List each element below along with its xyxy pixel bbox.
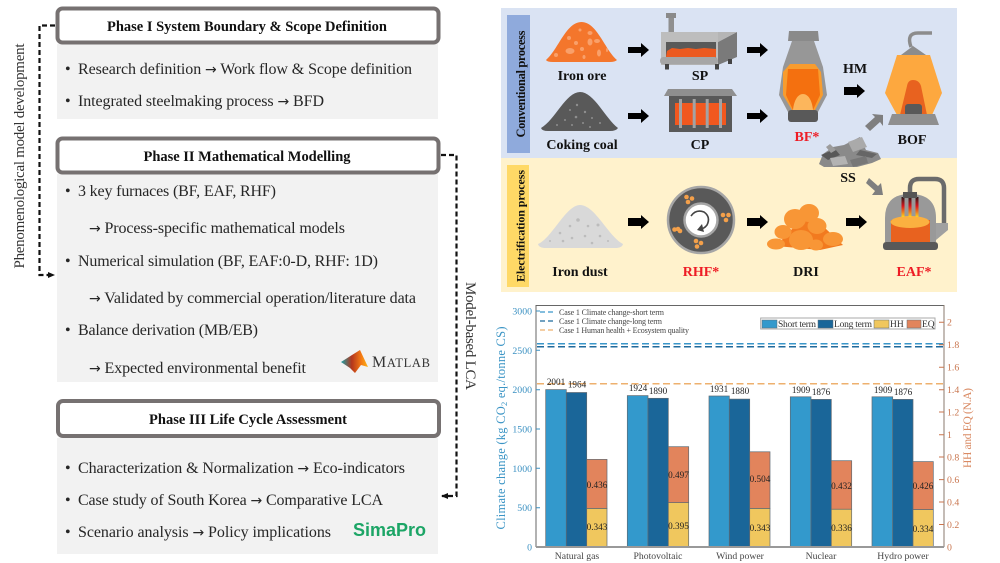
icon: MATLAB logo: MATLAB	[372, 354, 430, 371]
category labels: Natural gas	[555, 551, 599, 562]
chart axes and frame	[536, 305, 944, 547]
panel: phase III: Case study of South Korea → Comparative LCA	[78, 492, 383, 509]
panel: phase II: Balance derivation (MB/EB)	[78, 322, 258, 339]
bar value labels: 1924	[629, 383, 648, 393]
case reference lines	[537, 344, 944, 384]
bars: wind power	[709, 396, 770, 547]
bars: nuclear	[790, 397, 852, 547]
bar value labels: 1876	[812, 387, 831, 397]
legend: bar series: HH	[890, 320, 904, 330]
label: conventional process: Conventional process	[514, 30, 528, 138]
panel: phase I	[57, 8, 438, 119]
bar value labels: 0.504	[750, 474, 771, 484]
panel: phase II	[57, 138, 438, 382]
left axis tick labels: 0	[527, 542, 532, 554]
label: SP: SP	[692, 69, 709, 84]
icon: iron ore pile	[546, 22, 617, 62]
bar value labels: 1964	[568, 380, 587, 390]
bar value labels: 0.343	[587, 522, 608, 532]
bar value labels: 0.343	[750, 523, 771, 533]
category labels: Wind power	[716, 551, 765, 562]
panel: phase I: Integrated steelmaking process → BFD	[78, 93, 324, 110]
bar value labels: 0.432	[831, 481, 852, 491]
category labels: Nuclear	[806, 551, 837, 562]
label: HM: HM	[843, 62, 867, 77]
bar value labels: 1880	[731, 386, 750, 396]
right axis tick labels: 0.6	[947, 475, 959, 486]
legend: case reference lines: Case 1 Climate change-long term	[559, 317, 663, 326]
category labels: Hydro power	[877, 551, 929, 562]
right axis tick labels	[947, 318, 959, 554]
right axis tick labels: 1.4	[947, 385, 959, 396]
bars: photovoltaic	[627, 396, 689, 547]
bar value labels: 1931	[710, 384, 729, 394]
right axis tick labels: 0.8	[947, 452, 959, 464]
legend: case reference lines: Case 1 Human health + Ecosystem quality	[559, 326, 689, 335]
bar chart: climate change and HH/EQ by power source	[494, 305, 974, 562]
icon: DRI pellets	[767, 204, 843, 250]
bar value labels: 0.497	[668, 470, 689, 480]
arrow: scrap to BOF	[865, 114, 883, 131]
arrow: coal to CP	[628, 109, 649, 123]
label: EAF: EAF*	[896, 265, 932, 280]
arrow: phenomenological feedback	[40, 26, 55, 275]
legend: bar series: EQ	[922, 320, 935, 330]
icon: rotary hearth furnace	[668, 187, 734, 253]
label: electrification process	[507, 165, 529, 287]
panel: phase II: → Expected environmental benefit	[89, 360, 307, 377]
label: model-based LCA: Model-based LCA	[462, 282, 478, 390]
panel: phase III	[57, 401, 439, 554]
panel: phase III: •	[65, 460, 71, 477]
left column: methodology phases	[12, 8, 478, 554]
panel: phase II: 3 key furnaces (BF, EAF, RHF)	[78, 183, 276, 200]
icon: sinter plant	[660, 13, 737, 70]
label: BF: BF*	[795, 130, 819, 145]
right axis tick labels: 0.4	[947, 498, 959, 508]
left axis tick labels: 500	[517, 503, 532, 514]
label: SS: SS	[840, 171, 856, 186]
label: BOF: BOF	[898, 133, 926, 148]
left axis tick labels: 1000	[512, 464, 532, 475]
panel: phase I: •	[65, 61, 71, 78]
icon: electric arc furnace	[883, 179, 948, 250]
bar value labels: 0.334	[913, 524, 934, 534]
left axis tick labels: 2500	[512, 346, 532, 357]
bar value labels: 1876	[894, 387, 913, 397]
arrow: BF to BOF	[844, 84, 865, 98]
panel: phase III: •	[65, 524, 71, 541]
legend: case reference lines	[540, 308, 689, 335]
right axis tick labels: 0	[947, 542, 952, 554]
right axis tick labels: 0.2	[947, 520, 959, 531]
icon: coke plant	[664, 89, 737, 132]
category labels: Photovoltaic	[634, 551, 682, 562]
arrow: CP to BF	[747, 109, 768, 123]
right axis tick labels: 1	[947, 430, 952, 441]
panel: phase III: Phase III Life Cycle Assessment	[149, 412, 347, 428]
right axis tick labels: 2	[947, 318, 952, 328]
arrow: iron ore to SP	[628, 43, 649, 57]
icon: coking coal pile	[541, 92, 618, 131]
bar value labels: 0.436	[587, 480, 608, 490]
bar value labels: 1909	[792, 385, 811, 395]
label: DRI: DRI	[793, 265, 819, 280]
label: coking coal: Coking coal	[546, 138, 618, 153]
panel: phase III: Characterization & Normalization → Eco-indicators	[78, 460, 405, 477]
right axis tick labels: 1.2	[947, 408, 959, 418]
arrow: model-based LCA link	[441, 155, 456, 496]
legend: case reference lines: Case 1 Climate change-short term	[559, 308, 665, 317]
icon: MATLAB logo	[341, 350, 430, 373]
bars: hydro power	[872, 397, 933, 547]
bar value labels: 0.395	[668, 521, 689, 531]
panel: phase II: → Process-specific mathematical models	[89, 220, 345, 237]
bar value labels: 0.336	[831, 523, 852, 533]
label: iron dust: Iron dust	[552, 265, 608, 280]
label: conventional process	[507, 15, 530, 153]
bar value labels: 1890	[649, 386, 668, 396]
label: electrification process: Electrification process	[514, 170, 528, 282]
bars: natural gas	[546, 390, 607, 547]
icon: steel scrap pile	[819, 137, 881, 167]
process diagram	[501, 8, 957, 292]
panel: phase II: Phase II Mathematical Modelling	[144, 149, 351, 165]
legend: bar series: Short term	[778, 320, 817, 330]
panel: conventional process background	[501, 8, 957, 158]
legend: bar series: Long term	[834, 320, 873, 330]
panel: phase II: → Validated by commercial operation/literature data	[89, 290, 416, 307]
icon: basic oxygen furnace	[885, 33, 942, 125]
right axis title: HH and EQ (N.A)	[962, 388, 974, 468]
icon: SimaPro logo: SimaPro	[353, 520, 426, 540]
right axis tick labels: 1.6	[947, 362, 959, 374]
icon: blast furnace	[779, 31, 827, 122]
panel: phase II: •	[65, 253, 71, 270]
left axis title: eq./tonne CS)	[494, 326, 508, 402]
panel: phase I: Phase I System Boundary & Scope Definition	[107, 19, 387, 35]
left axis title: 2	[499, 402, 509, 406]
category labels	[555, 551, 929, 562]
left axis tick labels: 3000	[512, 306, 532, 318]
arrow: SP to BF	[747, 43, 768, 57]
left axis title: Climate change (kg CO	[494, 406, 508, 530]
panel: electrification process background	[501, 158, 957, 292]
panel: phase II: •	[65, 322, 71, 339]
panel: phase II: •	[65, 183, 71, 200]
panel: phase III: •	[65, 492, 71, 509]
bar value labels	[547, 377, 934, 534]
icon: iron dust pile	[538, 205, 623, 248]
left axis tick labels	[512, 306, 532, 554]
bar value labels: 1909	[874, 385, 893, 395]
arrow: DRI to EAF	[846, 215, 867, 229]
label: RHF: RHF*	[683, 265, 719, 280]
panel: phase III: Scenario analysis → Policy implications	[78, 524, 331, 541]
bar value labels: 0.426	[913, 481, 934, 491]
panel: phase I: •	[65, 93, 71, 110]
arrow: RHF to DRI	[747, 215, 768, 229]
right axis tick labels: 1.8	[947, 340, 959, 351]
arrow: scrap to EAF	[866, 178, 883, 195]
arrow: dust to RHF	[628, 215, 649, 229]
label: iron ore: Iron ore	[558, 69, 606, 84]
left axis tick labels: 2000	[512, 385, 532, 396]
bar value labels: 2001	[547, 377, 566, 387]
left axis tick labels: 1500	[512, 424, 532, 436]
label: phenomenological model development: Phenomenological model development	[12, 43, 28, 268]
legend: bar series	[761, 318, 935, 330]
label: CP: CP	[691, 138, 710, 153]
panel: phase II: Numerical simulation (BF, EAF:0-D, RHF: 1D)	[78, 253, 378, 270]
panel: phase I: Research definition → Work flow & Scope definition	[78, 61, 412, 78]
